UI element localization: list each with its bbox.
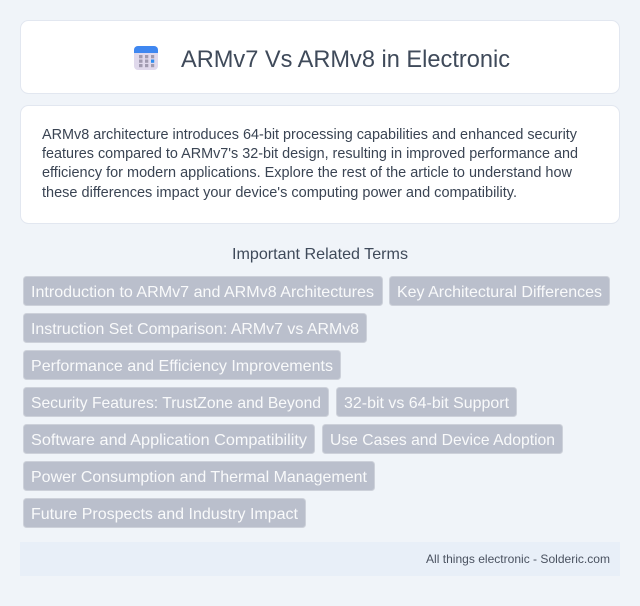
tag: key differences [390, 276, 610, 306]
tag: security [24, 388, 328, 416]
panel: intro paragraph: these differences impact your device's computing power and compatibility. [42, 185, 517, 201]
panel: term tags [24, 276, 610, 528]
tag: performance: Performance and Efficiency Improvements [31, 358, 333, 375]
panel: intro paragraph: features compared to ARMv7's 32-bit design, resulting in improved performance and [42, 146, 578, 162]
footer: All things electronic - Solderic.com [426, 552, 610, 566]
footer [20, 542, 620, 576]
tag: performance [24, 350, 340, 380]
tag: compatibility [24, 424, 314, 454]
tag: compatibility: Software and Application Compatibility [31, 432, 307, 449]
tag: use cases [322, 424, 562, 454]
title: ARMv7 Vs ARMv8 in Electronic [181, 46, 510, 73]
tag: 32 vs 64 bit: 32-bit vs 64-bit Support [344, 395, 510, 412]
tag: power: Power Consumption and Thermal Management [31, 469, 368, 486]
tag: introduction [24, 276, 382, 306]
tag: instruction set: Instruction Set Comparison: ARMv7 vs ARMv8 [31, 321, 359, 338]
tag: 32 vs 64 bit [336, 388, 516, 416]
tag: key differences: Key Architectural Differences [397, 284, 602, 301]
tag: use cases: Use Cases and Device Adoption [330, 432, 555, 449]
panel: title card [20, 20, 620, 94]
tag: security: Security Features: TrustZone and Beyond [31, 395, 321, 412]
tag: instruction set [24, 314, 366, 342]
tag: future: Future Prospects and Industry Impact [31, 506, 299, 523]
tag: power [24, 462, 374, 490]
tag: future [24, 498, 306, 528]
icon: calendar [134, 46, 158, 70]
panel: intro paragraph: ARMv8 architecture introduces 64-bit processing capabilities and enhanced security [42, 127, 578, 143]
panel: intro paragraph [20, 106, 620, 224]
tag: introduction: Introduction to ARMv7 and ARMv8 Architectures [31, 284, 374, 301]
panel: intro paragraph: efficiency for modern applications. Explore the rest of the article to understand how [42, 165, 573, 181]
heading: related terms: Important Related Terms [232, 246, 408, 263]
